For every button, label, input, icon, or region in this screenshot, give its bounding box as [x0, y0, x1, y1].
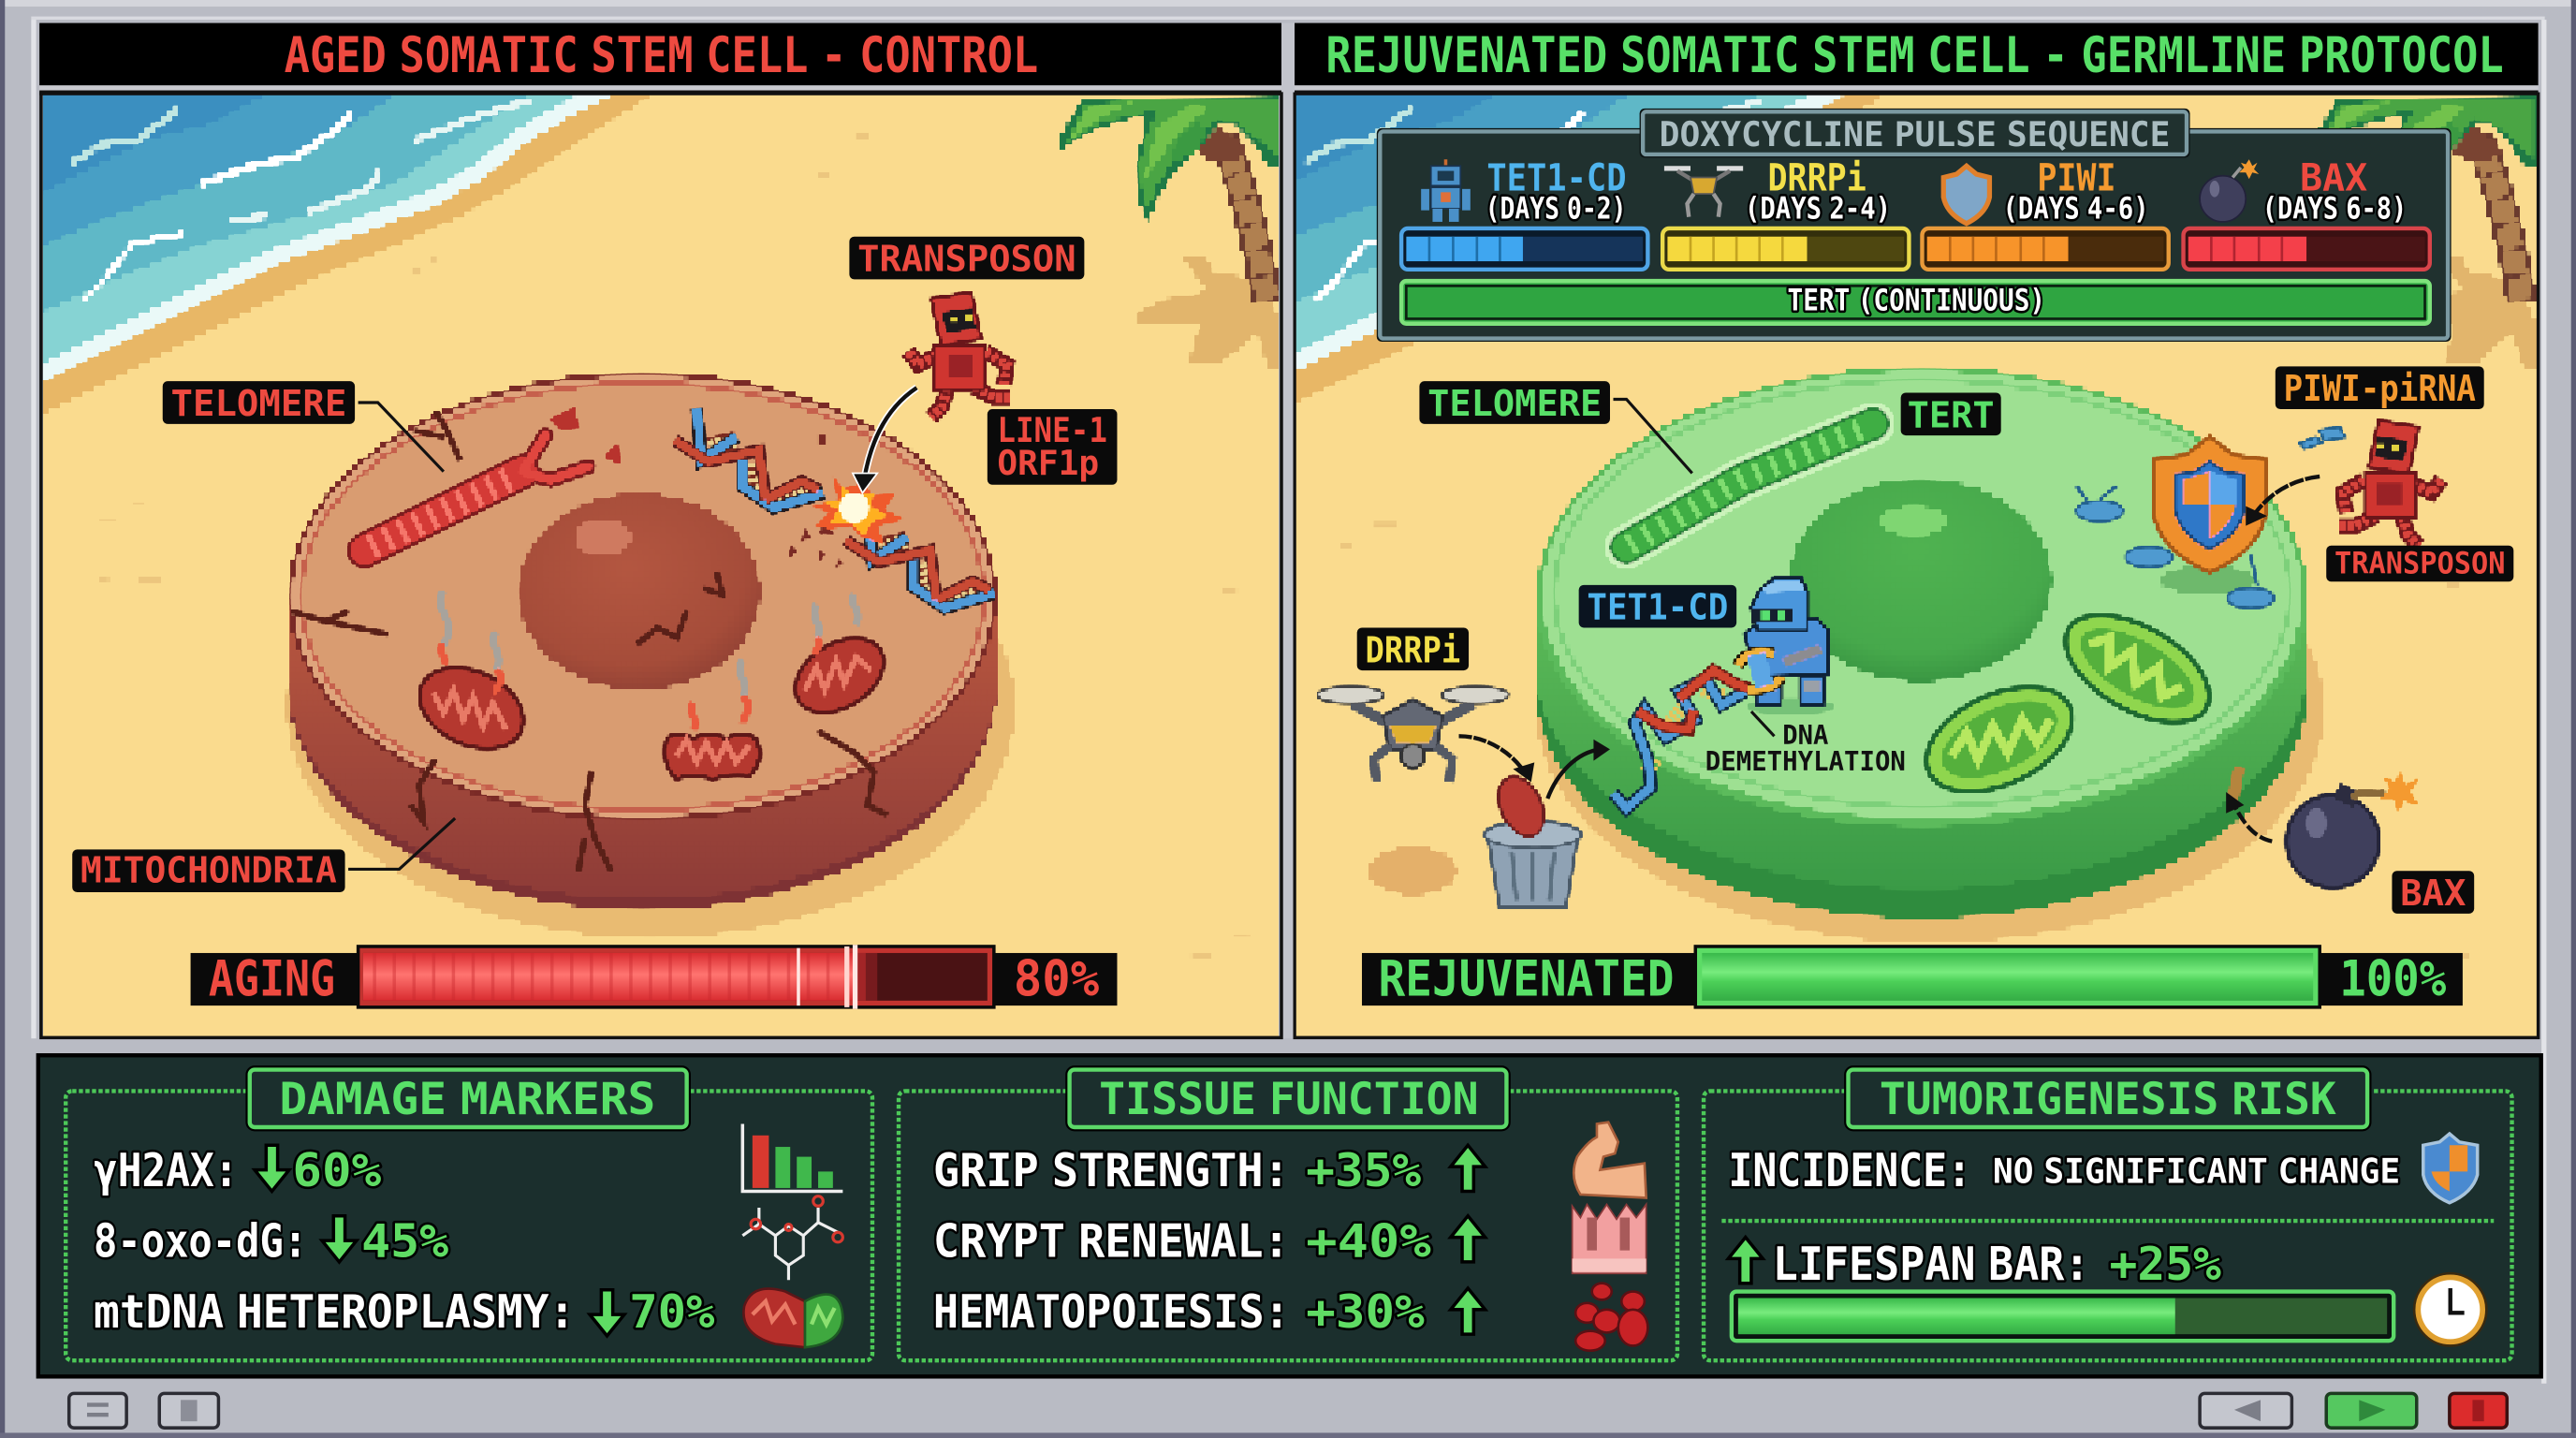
label: PIWI-piRNA: PIWI-piRNA	[2284, 368, 2476, 410]
panel: rejuvenated stem cell scene	[1224, 82, 2539, 1037]
mitochondria damaged	[407, 624, 897, 779]
group: damage markers	[66, 1070, 872, 1360]
label: telomere: TELOMERE	[1427, 383, 1602, 425]
cracks	[291, 411, 887, 871]
telomere restored	[1627, 424, 1873, 547]
pulse: PIWI: PIWI	[2037, 156, 2116, 200]
metric: hematopoiesis: HEMATOPOIESIS:	[933, 1284, 1290, 1339]
arrow: transposon to shield	[2256, 477, 2320, 513]
metric: 8-oxo-dG: 8-oxo-dG:	[94, 1214, 307, 1269]
pulse: DRRPi: DRRPi	[1767, 156, 1866, 200]
icon: small shield	[2423, 1134, 2478, 1203]
icon: clock	[2414, 1273, 2486, 1345]
telomere damaged	[365, 407, 621, 550]
beach background and cell body	[0, 82, 1281, 1036]
arrow: drone to trash	[1459, 736, 1525, 772]
pulse: TET1-CD: TET1-CD	[1486, 156, 1627, 200]
metric: lifespan bar: LIFESPAN BAR:	[1773, 1237, 2089, 1291]
BAX bomb	[2228, 766, 2419, 888]
label: DRRPi: DRRPi	[1365, 629, 1460, 671]
group: tissue function: TISSUE FUNCTION	[1099, 1074, 1479, 1125]
label: transposon: TRANSPOSON	[2334, 548, 2506, 581]
arrowhead bomb	[2226, 792, 2244, 814]
label: TERT: TERT	[1908, 394, 1995, 436]
green cell details	[1318, 420, 2441, 907]
arrow: transposon strike	[853, 388, 916, 493]
metric: mtDNA heteroplasmy: mtDNA HETEROPLASMY:	[94, 1284, 575, 1339]
DNA helix repaired	[1614, 670, 1758, 809]
transposon robot blocked	[2339, 420, 2441, 546]
metric: crypt renewal: CRYPT RENEWAL:	[933, 1214, 1290, 1269]
map border	[1295, 94, 2539, 1037]
icon: molecule	[742, 1196, 842, 1280]
icon: half damaged mitochondrion	[743, 1289, 842, 1347]
metric: incidence: INCIDENCE:	[1728, 1143, 1971, 1197]
mitochondria healthy	[1924, 613, 2212, 793]
pulse: TET1-CD	[1401, 156, 1647, 270]
drone	[1318, 687, 1508, 782]
group: damage markers: DAMAGE MARKERS	[279, 1074, 655, 1125]
label: line-1 orf1p	[988, 409, 1117, 485]
label: TET1-CD: TET1-CD	[1587, 587, 1728, 629]
label: BAX: BAX	[2400, 873, 2466, 915]
pulse: PIWI: (DAYS 4-6)	[2002, 192, 2149, 226]
group: tumorigenesis risk: TUMORIGENESIS RISK	[1880, 1074, 2336, 1125]
arrowhead drone	[1513, 762, 1534, 782]
rejuvenated progress bar	[1362, 945, 2463, 1009]
smoke wisps	[440, 592, 858, 729]
pulse: BAX: (DAYS 6-8)	[2262, 192, 2407, 226]
debris	[788, 435, 842, 567]
aging progress bar: 80%	[1014, 951, 1099, 1008]
pulse: DRRPi: (DAYS 2-4)	[1745, 192, 1891, 226]
metric: mtDNA heteroplasmy: 70%	[629, 1284, 715, 1339]
labels and bars	[41, 94, 1281, 1037]
pulse: TERT continuous	[1401, 281, 2430, 324]
label: DNA demethylation: DEMETHYLATION	[1705, 746, 1906, 777]
icon: intestinal crypts	[1573, 1204, 1647, 1273]
metric: incidence	[1728, 1143, 2400, 1197]
panel: metrics dashboard	[37, 1053, 2543, 1379]
transposon robot	[909, 292, 1010, 418]
header: aged control	[39, 23, 1281, 95]
icon: bar chart	[742, 1123, 842, 1191]
TET1-CD robot	[1738, 579, 1834, 714]
arrow: trash to cell	[1547, 749, 1600, 799]
label: mitochondria	[72, 818, 455, 892]
map border	[41, 94, 1281, 1037]
metric: lifespan bar: +25%	[2110, 1237, 2221, 1291]
label: transposon: TRANSPOSON	[857, 239, 1076, 281]
label: DNA demethylation: DNA	[1782, 720, 1829, 751]
pulse: TERT continuous: TERT (CONTINUOUS)	[1788, 285, 2045, 318]
arrow: bomb to cell	[2234, 805, 2272, 842]
icon: flexed arm	[1573, 1123, 1647, 1197]
aging progress bar: AGING	[209, 951, 335, 1008]
group: tissue function	[899, 1070, 1677, 1360]
metric: gamma H2AX: 60%	[292, 1143, 382, 1197]
label: DNA demethylation	[1705, 712, 1906, 777]
pulse: BAX: BAX	[2300, 156, 2367, 200]
pulse: TET1-CD: (DAYS 0-2)	[1486, 192, 1627, 226]
label: line-1 orf1p: LINE-1	[997, 410, 1107, 450]
doxycycline pulse sequence panel: DOXYCYCLINE PULSE SEQUENCE	[1660, 114, 2170, 154]
icon: red blood cells	[1575, 1284, 1647, 1351]
window control buttons left	[69, 1393, 218, 1428]
metric: crypt renewal: +40%	[1306, 1214, 1431, 1269]
pulse: BAX	[2184, 156, 2430, 270]
metric: 8-oxo-dG: 45%	[361, 1214, 449, 1269]
header: aged control: AGED SOMATIC STEM CELL - CONTROL	[285, 27, 1038, 84]
metric: grip strength	[933, 1143, 1486, 1197]
cell details: telomere, DNA, mitochondria, robot	[291, 292, 1010, 871]
label: telomere	[163, 381, 444, 472]
metric: gamma H2AX: γH2AX:	[94, 1143, 238, 1197]
explosion	[813, 477, 903, 546]
metric: hematopoiesis: +30%	[1306, 1284, 1425, 1339]
lifespan progress bar	[1732, 1292, 2393, 1341]
metric: crypt renewal	[933, 1214, 1486, 1269]
label: telomere: TELOMERE	[171, 383, 346, 425]
metric: gamma H2AX	[94, 1143, 382, 1197]
pulse: DRRPi	[1662, 156, 1909, 270]
arrowhead shield	[2246, 506, 2267, 526]
rejuvenated progress bar: 100%	[2339, 951, 2447, 1008]
trash can with damaged mitochondrion	[1486, 770, 1580, 907]
shield	[2154, 437, 2265, 572]
metric: grip strength: GRIP STRENGTH:	[933, 1143, 1290, 1197]
aging progress bar	[191, 945, 1117, 1009]
label: telomere	[1419, 381, 1692, 473]
metric: incidence: NO SIGNIFICANT CHANGE	[1993, 1152, 2400, 1192]
blocked transposon ripples	[2076, 427, 2345, 608]
rejuvenated progress bar: REJUVENATED	[1379, 951, 1674, 1008]
label: mitochondria: MITOCHONDRIA	[80, 849, 337, 891]
group: tumorigenesis risk	[1704, 1070, 2512, 1360]
panel: aged stem cell scene	[0, 82, 1281, 1037]
labels, panel and bars	[1295, 94, 2539, 1037]
metric: grip strength: +35%	[1306, 1143, 1422, 1197]
DNA helix upper fragment	[675, 409, 823, 507]
pulse: PIWI	[1922, 156, 2169, 270]
window control buttons right	[2200, 1393, 2507, 1428]
arrowhead cell	[1593, 740, 1610, 761]
DNA helix lower fragment	[842, 531, 995, 616]
beach background and green cell body	[1224, 82, 2537, 1036]
label: line-1 orf1p: ORF1p	[997, 443, 1099, 483]
doxycycline pulse sequence panel	[1377, 109, 2452, 342]
